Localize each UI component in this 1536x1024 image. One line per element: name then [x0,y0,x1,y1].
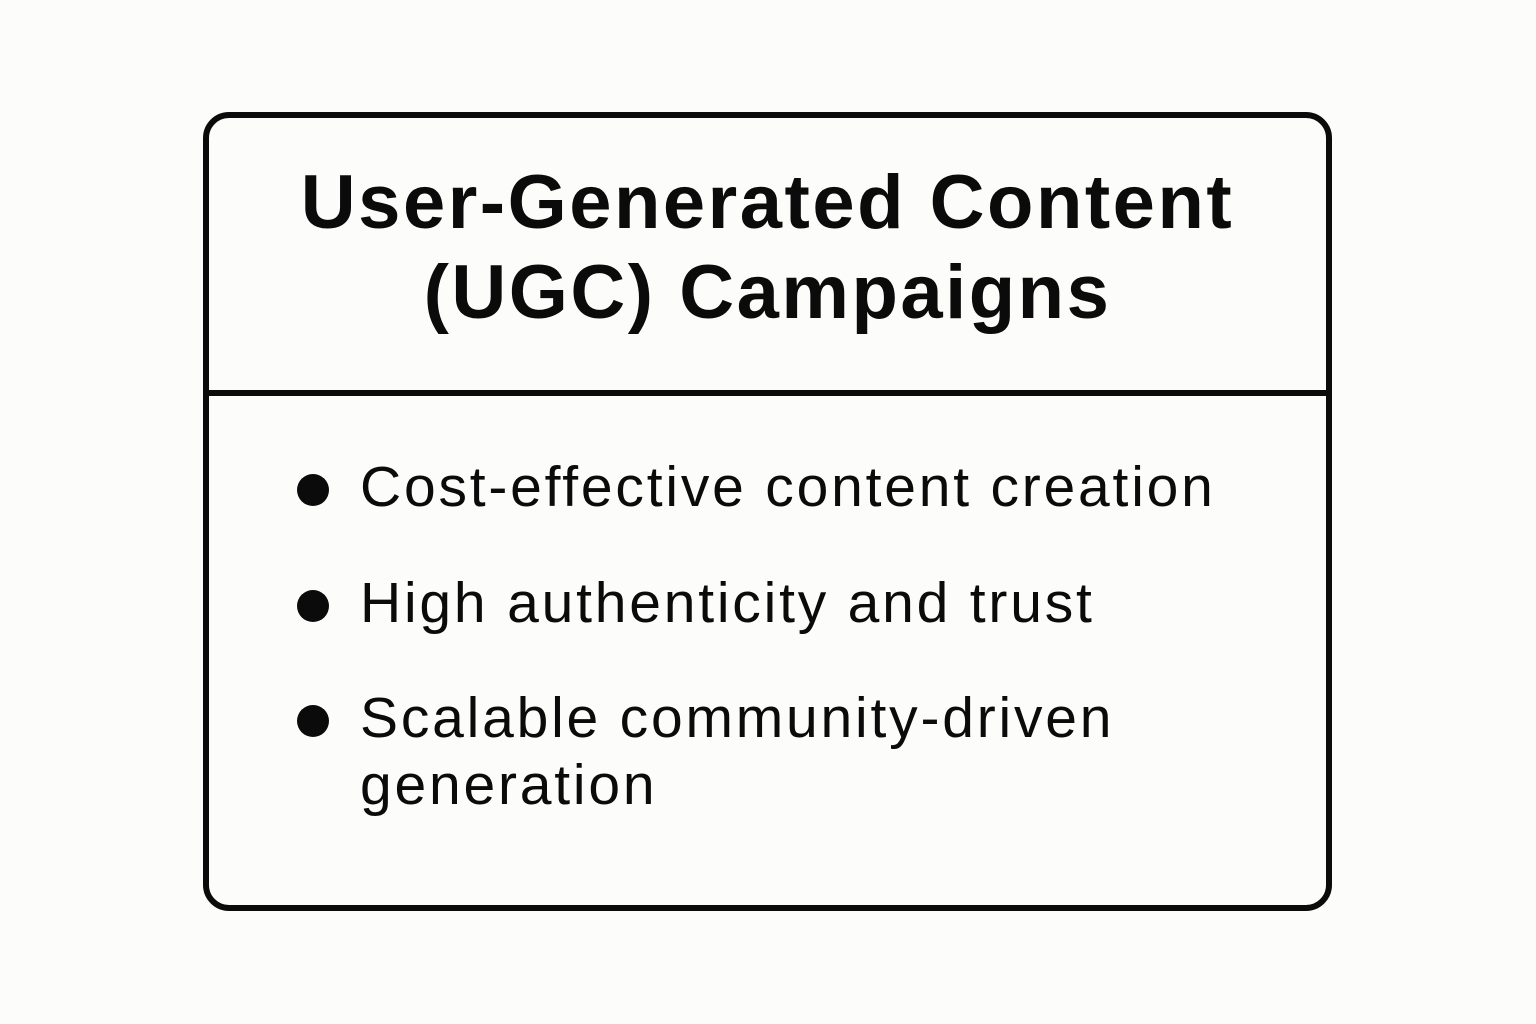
title [301,160,1234,335]
bullet dot 3 [297,705,329,737]
bullet dot 2 [297,590,329,622]
bullet text 1: Cost-effective content creation [360,455,1216,519]
panel: UGC card [203,112,1332,911]
bullet text 2: High authenticity and trust [360,571,1095,635]
bullet text 3: Scalable community-driven [360,686,1114,750]
bullet dot 1 [297,474,329,506]
title: (UGC) Campaigns [424,250,1111,335]
bullet text 3 [360,686,1114,817]
bullet text 3: generation [360,753,657,817]
title: User-Generated Content [301,160,1234,245]
